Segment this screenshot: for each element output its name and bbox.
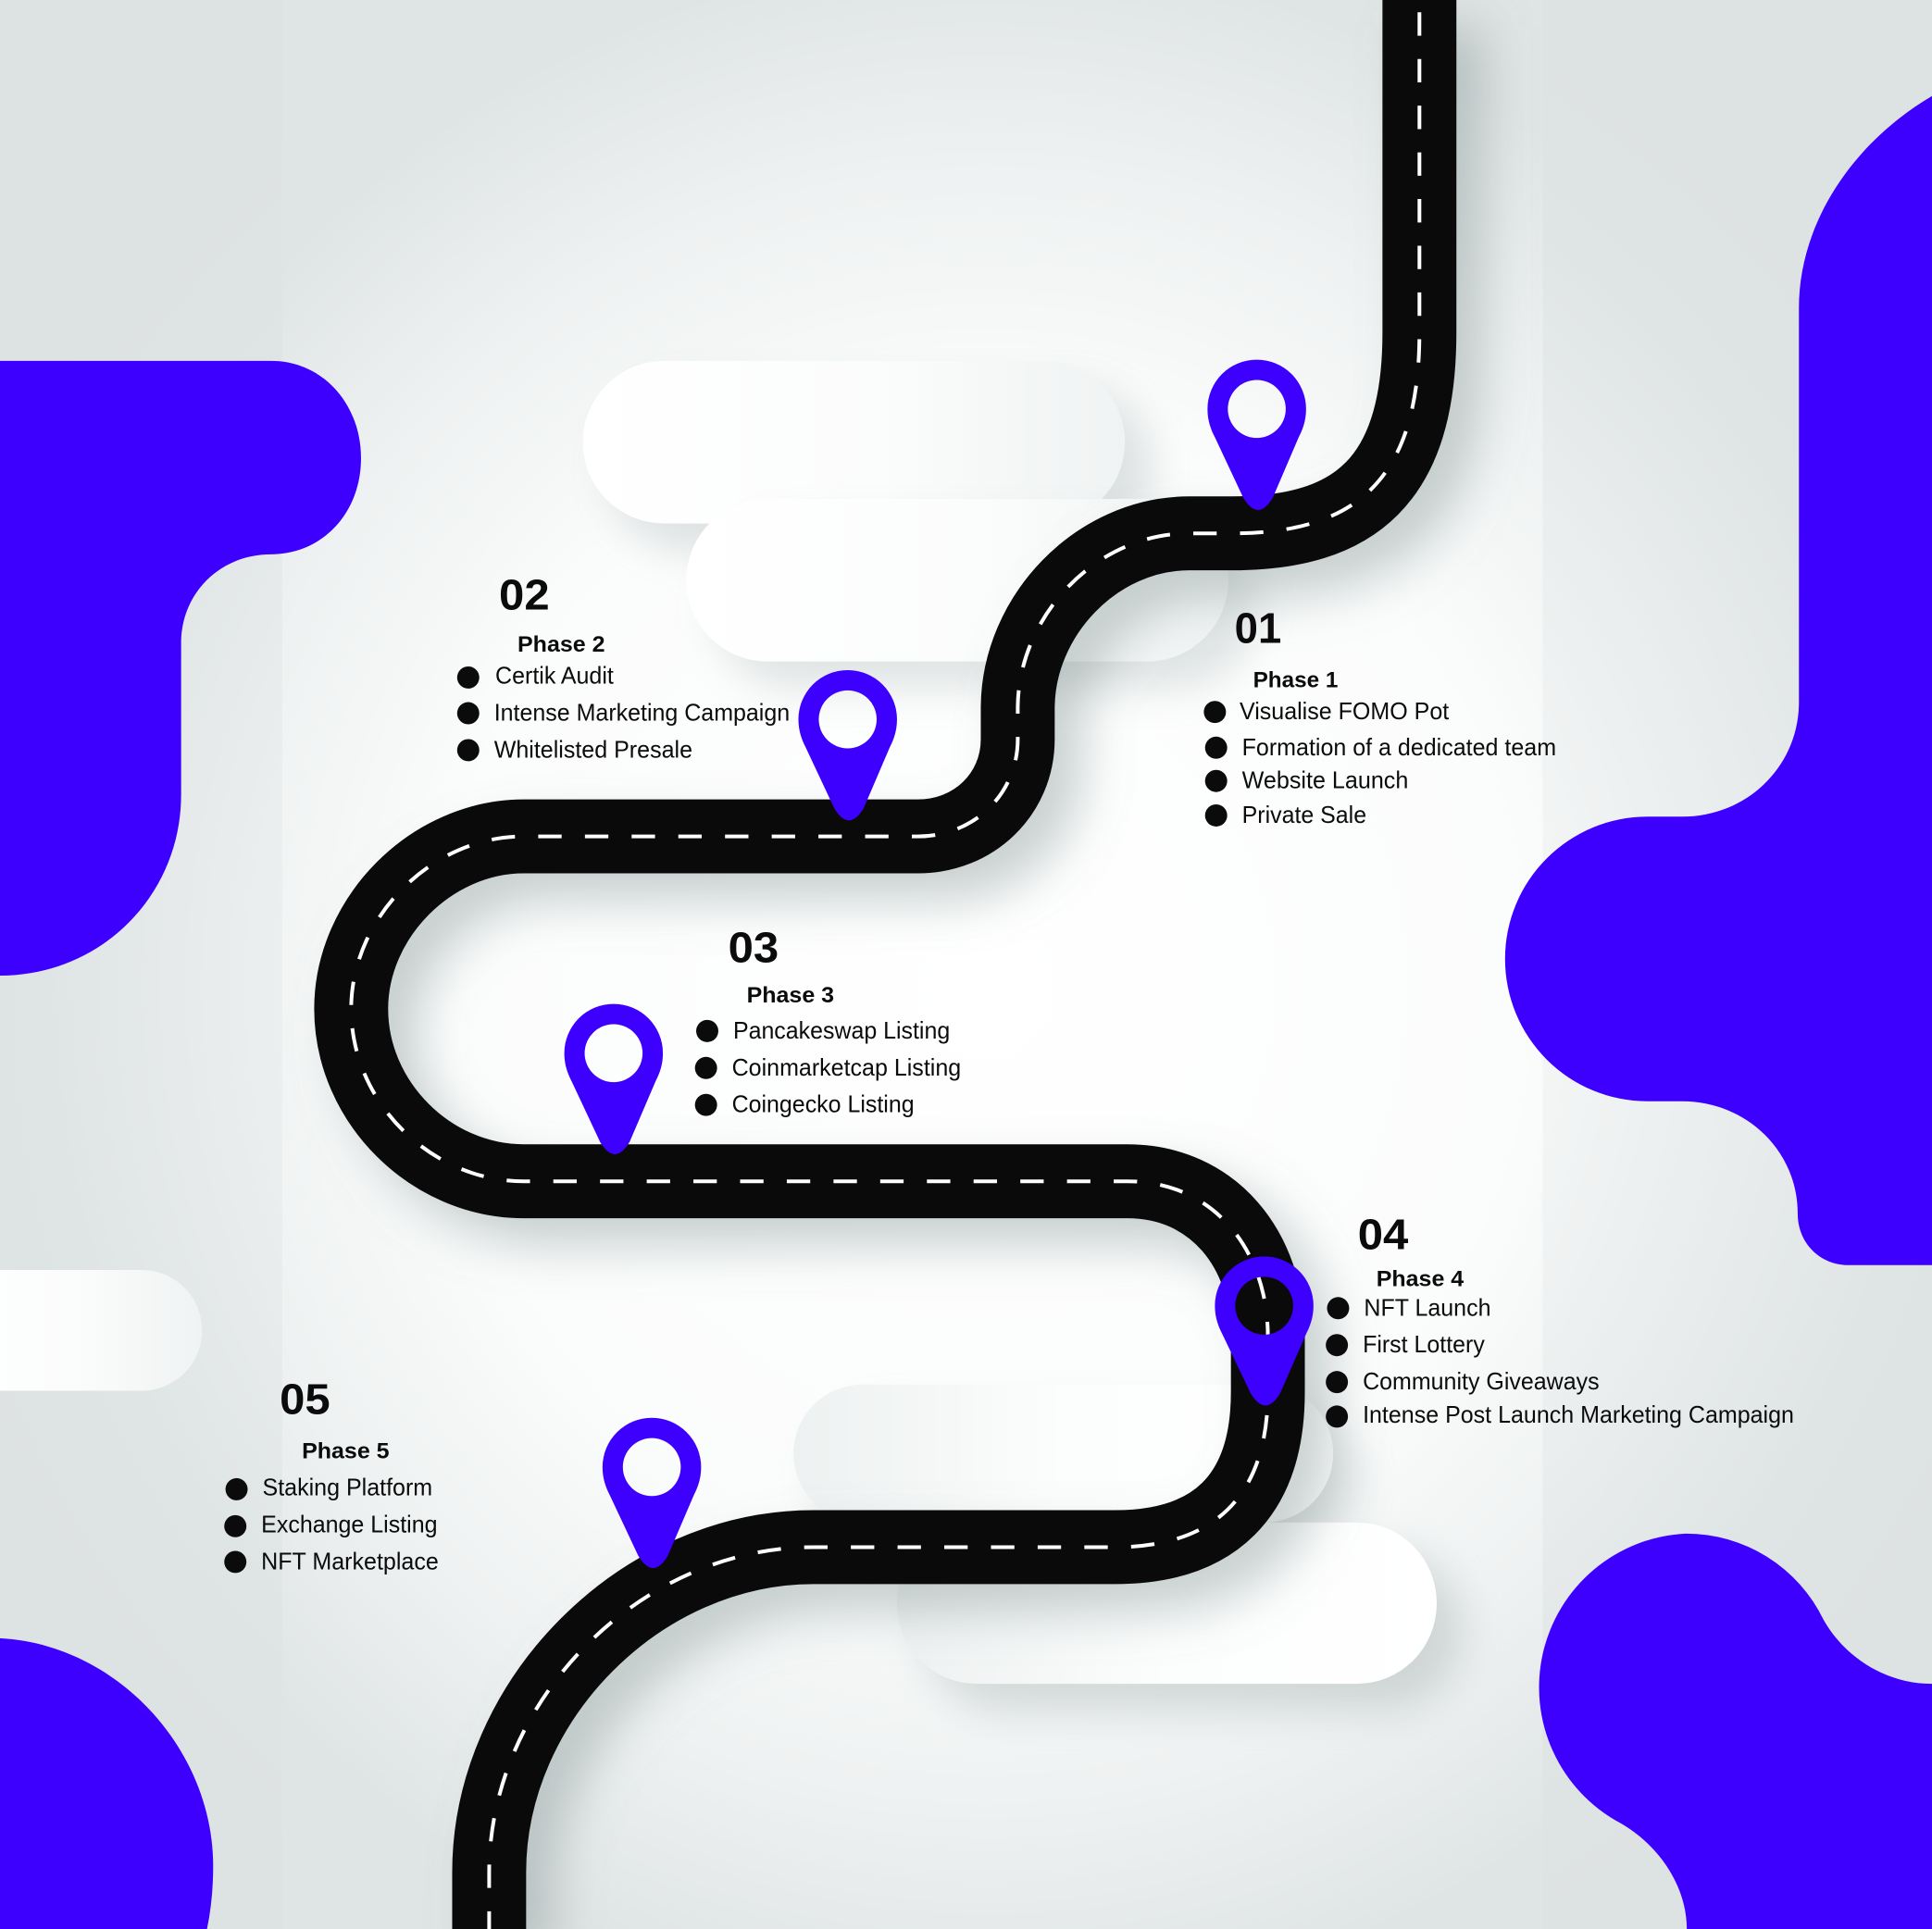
phase 5 text block: Phase 5 — [302, 1439, 390, 1464]
phase 1 text block: Formation of a dedicated team — [1242, 735, 1556, 761]
phase 4 text block: Intense Post Launch Marketing Campaign — [1363, 1402, 1794, 1428]
phase 4 text block: 04 — [1358, 1210, 1408, 1258]
phase 4 text block — [1326, 1210, 1794, 1428]
phase 4 text block: Phase 4 — [1377, 1266, 1465, 1291]
phase 2 text block: Phase 2 — [517, 632, 605, 657]
map pin 4 — [1215, 1256, 1314, 1405]
phase 2 text block: Whitelisted Presale — [494, 737, 692, 763]
phase 5 text block: Exchange Listing — [261, 1512, 438, 1537]
map pin 3 — [565, 1004, 663, 1154]
map pin 5 — [603, 1418, 701, 1568]
phase 3 text block: 03 — [729, 923, 779, 971]
decorative shape: left purple blob — [0, 361, 361, 976]
map pin 1 — [1207, 360, 1306, 510]
map pin 2 — [798, 670, 897, 820]
phase 1 text block: Website Launch — [1242, 768, 1408, 794]
phase 3 text block — [695, 923, 961, 1118]
phase 4 text block: Community Giveaways — [1363, 1369, 1600, 1395]
decorative shape: right purple blob — [1505, 96, 1932, 1265]
phase 5 text block: 05 — [280, 1375, 330, 1424]
phase 2 text block — [457, 571, 790, 763]
phase 1 text block: Private Sale — [1242, 803, 1366, 828]
phase 3 text block: Coinmarketcap Listing — [732, 1055, 961, 1081]
phase 1 text block: 01 — [1235, 604, 1281, 653]
phase 4 text block: NFT Launch — [1364, 1295, 1491, 1321]
phase 5 text block: Staking Platform — [263, 1475, 432, 1501]
phase 1 text block — [1203, 604, 1556, 828]
road — [351, 0, 1447, 1929]
phase 3 text block: Coingecko Listing — [732, 1092, 915, 1118]
phase 2 text block: 02 — [499, 571, 550, 619]
phase 5 text block: NFT Marketplace — [261, 1549, 439, 1574]
phase 3 text block: Phase 3 — [747, 983, 834, 1008]
cloud shapes — [0, 361, 1464, 1711]
phase 1 text block: Phase 1 — [1253, 668, 1338, 693]
decorative shape: bottom-right purple blob — [1539, 1534, 1932, 1929]
phase 4 text block: First Lottery — [1363, 1332, 1485, 1358]
phase 1 text block: Visualise FOMO Pot — [1240, 699, 1450, 725]
phase 5 text block — [224, 1375, 439, 1574]
phase 3 text block: Pancakeswap Listing — [733, 1018, 950, 1044]
decorative shape: bottom-left purple blob — [0, 1638, 213, 1929]
phase 2 text block: Certik Audit — [495, 664, 615, 690]
phase 2 text block: Intense Marketing Campaign — [494, 701, 790, 727]
